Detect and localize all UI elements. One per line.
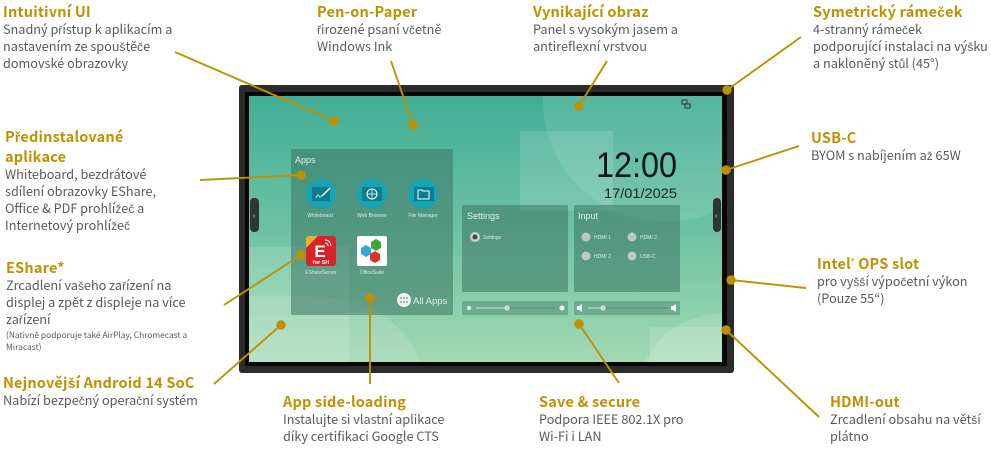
- callout: App side-loading: [283, 391, 444, 445]
- all apps: [397, 293, 448, 307]
- app: eshare: for SH: [313, 260, 329, 266]
- app: eshare: EShareServer: [305, 270, 337, 276]
- callout: USB-C: [811, 127, 961, 164]
- leader: android: [214, 320, 286, 384]
- callout: EShare: [6, 257, 187, 353]
- app: officesuite: [357, 236, 387, 276]
- callout: Intel OPS slot: [817, 253, 968, 307]
- callout: Save & secure: Save & secure: [539, 391, 640, 412]
- input panel: HDMI 2: [640, 235, 657, 241]
- callout: EShare: displej a zpět z displeje na více: [6, 292, 186, 311]
- settings panel: Settings: [467, 211, 500, 221]
- callout: Save & secure: Wi-Fi i LAN: [539, 426, 602, 445]
- input panel: HDMI 2: [594, 254, 611, 260]
- callout: USB-C: BYOM s nabíjením až 65W: [811, 145, 961, 164]
- callout: Intel OPS slot: Intel® OPS slot: [817, 253, 919, 274]
- callout: Pen-on-Paper: [317, 1, 441, 55]
- input panel: [574, 205, 680, 292]
- apps panel: Apps: [295, 155, 316, 165]
- leader: preinstalled apps: [200, 170, 306, 180]
- callout: Pen-on-Paper: řirozené psaní včetně: [317, 19, 441, 38]
- callout: EShare: EShare*: [6, 257, 65, 278]
- leader: pen-on-paper: [391, 61, 418, 130]
- side handles: [250, 198, 259, 232]
- monitor with home screen: [174, 36, 820, 418]
- callout: Symetrický rámeček: Symetrický rámeček: [813, 1, 963, 22]
- app: whiteboard: [306, 179, 336, 219]
- callout: Save & secure: Podpora IEEE 802.1X pro: [539, 409, 683, 428]
- input panel: Input: [578, 211, 599, 221]
- callout: Intuitivní UI: Intuitivní UI: [3, 1, 91, 22]
- callout: USB-C: USB-C: [811, 127, 856, 148]
- callout: Předinstalované aplikace: Internetový prohlížeč: [5, 215, 130, 234]
- callout: HDMI-out: HDMI-out: [830, 391, 900, 412]
- leader: symmetric bezel: [722, 37, 801, 95]
- app: web browser: [357, 179, 387, 219]
- callout: Intel OPS slot: (Pouze 55“): [817, 288, 885, 307]
- callout: Vynikající obraz: Vynikající obraz: [533, 1, 649, 22]
- callout: Předinstalované aplikace: sdílení obrazovky EShare,: [5, 181, 156, 200]
- monitor bezel: [239, 85, 734, 373]
- callout: Intuitivní UI: [3, 1, 172, 72]
- leader: save and secure: [574, 319, 619, 383]
- app: officesuite: OfficeSuite: [360, 270, 384, 276]
- callout: HDMI-out: Zrcadlení obsahu na větší: [830, 409, 981, 428]
- callout: Předinstalované aplikace: Office & PDF prohlížeč a: [5, 198, 144, 217]
- callout: Pen-on-Paper: Pen-on-Paper: [317, 1, 417, 22]
- callout: App side-loading: App side-loading: [283, 391, 406, 412]
- callout: Nejnovější Android 14 SoC: Nejnovější Android 14 SoC: [3, 372, 195, 393]
- leader: side-loading: [365, 293, 375, 384]
- app: file manager: File Manager: [408, 213, 438, 219]
- apps panel: [291, 149, 453, 315]
- settings panel: [462, 205, 568, 292]
- callout: Symetrický rámeček: podporující instalaci na výšku: [813, 36, 988, 55]
- date: 17/01/2025: [604, 185, 677, 201]
- callout: Pen-on-Paper: Windows Ink: [317, 36, 392, 55]
- callout: Předinstalované aplikace: Whiteboard, bezdrátové: [5, 164, 146, 183]
- callout: Nejnovější Android 14 SoC: Nabízí bezpečný operační systém: [3, 390, 198, 409]
- leader: eshare: [224, 250, 306, 305]
- callout: Intuitivní UI: nastavením ze spouštěče: [3, 36, 150, 55]
- callout: Předinstalované aplikace: [5, 126, 156, 234]
- leader: bright display: [574, 61, 607, 111]
- volume slider: [574, 301, 680, 315]
- callout: Nejnovější Android 14 SoC: [3, 372, 198, 409]
- callout: Symetrický rámeček: 4-stranný rámeček: [813, 19, 922, 38]
- callout: EShare: Zrcadlení vašeho zařízení na: [6, 275, 171, 294]
- top status icon: [682, 100, 690, 108]
- app: file manager: [408, 179, 438, 219]
- callout: EShare: zařízení: [6, 309, 50, 328]
- all apps: All Apps: [413, 296, 448, 307]
- app: eshare: E: [314, 242, 326, 261]
- callout: App side-loading: díky certifikaci Google CTS: [283, 426, 439, 445]
- clock: 12:00: [596, 146, 677, 185]
- callout: HDMI-out: [830, 391, 981, 445]
- callout: Intel OPS slot: pro vyšší výpočetní výkon: [817, 271, 968, 290]
- callout: Předinstalované aplikace: aplikace: [5, 146, 66, 167]
- monitor with home screen: ‹: [715, 213, 718, 220]
- leader: USB-C: [721, 146, 799, 175]
- callout: EShare: Miracast): [6, 341, 41, 353]
- input panel: HDMI 1: [594, 235, 611, 241]
- screen wallpaper: [249, 96, 722, 362]
- leader: HDMI-out: [721, 325, 819, 417]
- app: whiteboard: Whiteboard: [307, 213, 333, 219]
- callout: Vynikající obraz: Panel s vysokým jasem a: [533, 19, 678, 38]
- leader: OPS slot: [726, 275, 806, 288]
- brightness slider: [462, 301, 568, 315]
- callout: Save & secure: [539, 391, 683, 445]
- settings panel: Settings: [483, 235, 502, 241]
- monitor with home screen: ›: [253, 213, 256, 220]
- app: web browser: Web Browser: [357, 213, 387, 219]
- callout: Předinstalované aplikace: Předinstalované: [5, 126, 123, 147]
- callout: Intuitivní UI: domovské obrazovky: [3, 53, 128, 72]
- callout: Symetrický rámeček: a nakloněný stůl (45°): [813, 53, 939, 72]
- app: eshare: [305, 236, 337, 276]
- callout leader lines: [175, 37, 819, 417]
- callout: HDMI-out: plátno: [830, 426, 869, 445]
- callout: App side-loading: Instalujte si vlastní aplikace: [283, 409, 444, 428]
- callout: Intuitivní UI: Snadný přístup k aplikacím a: [3, 19, 172, 38]
- leader: intuitive UI: [175, 52, 339, 126]
- callout: Vynikající obraz: antireflexní vrstvou: [533, 36, 647, 55]
- callout: Vynikající obraz: [532, 1, 678, 55]
- input panel: USB-C: [640, 254, 656, 260]
- callout: EShare: (Nativně podporuje také AirPlay, Chromecast a: [6, 329, 187, 341]
- callout: Symetrický rámeček: [813, 1, 988, 72]
